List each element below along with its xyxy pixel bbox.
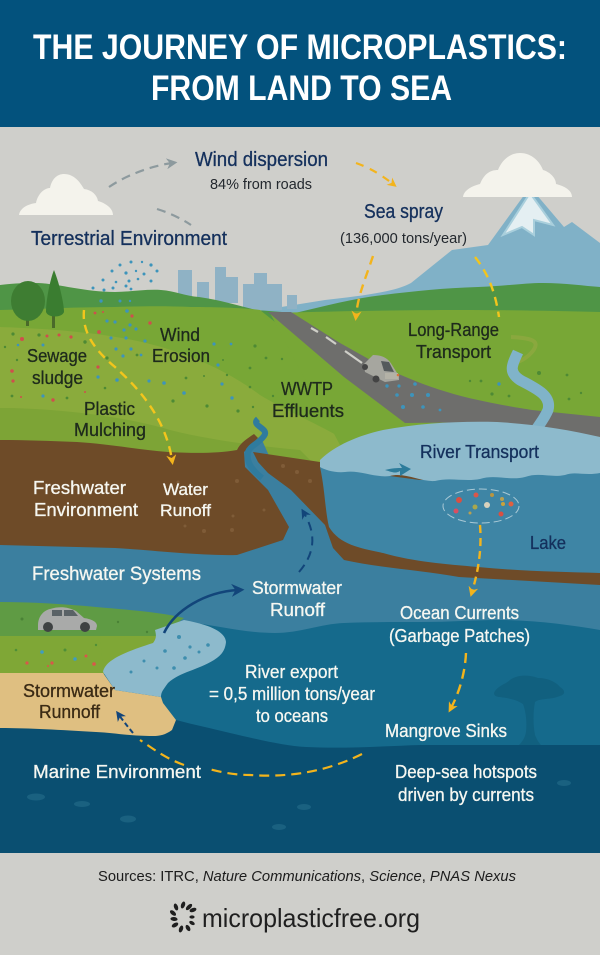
arrow: gray dispersion [109,163,172,187]
road [268,312,600,437]
label: mangrove sinks: Mangrove Sinks [385,721,507,741]
label: long-range transport: Transport [416,342,491,362]
label: wind erosion: Wind [160,325,200,345]
label: stormwater runoff: Stormwater [252,578,342,598]
estuary [103,620,226,697]
label: sea spray: Sea spray [364,201,443,223]
brown soil [0,434,600,585]
icon: mangrove tree [494,676,564,745]
icon: right cloud [463,153,572,197]
label: stormwater runnoff on sand [23,681,115,722]
upper river [511,337,549,440]
arrow: yellow to sea spray [356,163,393,184]
shore litter dots [15,618,148,667]
label: sea spray [340,201,467,247]
deep sea specks [27,780,571,830]
arrow: sea spray downward [356,256,373,316]
arrow: marine long curve right [209,754,362,776]
label: water runoff: Runoff [160,501,211,520]
label: wind dispersion: Wind dispersion [195,149,328,171]
deep ocean [0,720,600,853]
header banner [0,0,600,127]
label: ocean currents [389,603,530,646]
label: sewage sludge [27,346,87,388]
label: stormwater runnoff on sand: Runnoff [39,702,101,722]
back hills [0,283,600,340]
left land [0,602,184,674]
label: lake: Lake [530,533,566,553]
label: stormwater runoff [252,578,342,620]
label: terrestrial environment: Terrestrial Environment [31,228,227,250]
label: freshwater systems: Freshwater Systems [32,564,201,585]
label: wwtp effluents [272,379,344,421]
title: FROM LAND TO SEA [151,69,452,108]
freshwater band [0,440,600,660]
label: river export [209,662,375,726]
label: long-range transport: Long-Range [408,320,499,340]
label: wind dispersion: 84% from roads [210,176,312,193]
estuary particles [130,635,210,674]
label: sewage sludge: sludge [32,368,83,388]
label: ocean currents: (Garbage Patches) [389,626,530,646]
arrow: gray dashes [157,209,191,225]
ocean mid layer [0,620,600,760]
label: deep-sea hotspots: driven by currents [398,785,534,805]
label: wind erosion [152,325,210,366]
sky background [0,127,600,327]
icon: trees [11,270,64,328]
label: plastic mulching: Mulching [74,420,146,440]
label: water runoff [160,480,211,520]
label: freshwater environment [33,478,138,520]
sand beach [0,673,176,736]
arrow: navy dashed up [299,513,312,572]
label: deep-sea hotspots [395,762,537,805]
icon: car on road [362,355,399,382]
footer [0,853,600,955]
icon: city skyline [178,267,297,310]
arrow: marine long curve left [140,740,184,765]
label: river export: to oceans [256,706,328,726]
label: plastic mulching: Plastic [84,399,135,419]
label: freshwater environment: Environment [34,500,138,520]
icon: fish in lake [385,463,411,476]
icon: left cloud [19,174,113,215]
label: wwtp effluents: Effluents [272,401,344,421]
label: water runoff: Water [163,480,208,499]
soil speckles [176,464,312,533]
label: plastic mulching [74,399,146,440]
icon: logo mark [169,901,197,933]
brand name: microplasticfree.org [202,903,420,933]
arrow: navy dashed to sand [119,715,133,733]
icon: tributary river [248,419,265,478]
label: river export: River export [245,662,338,682]
label: ocean currents: Ocean Currents [400,603,519,623]
label: freshwater environment: Freshwater [33,478,126,498]
label: wwtp effluents: WWTP [281,379,333,399]
label: stormwater runnoff on sand: Stormwater [23,681,115,701]
label: deep-sea hotspots: Deep-sea hotspots [395,762,537,782]
label: river export: = 0,5 million tons/year [209,684,375,704]
icon: car on shore [38,607,97,632]
title [33,28,567,108]
label: stormwater runoff: Runoff [270,600,326,620]
sources line: Sources: ITRC, Nature Communications, Science, PNAS Nexus [98,869,516,885]
icon: garbage patch [443,489,519,523]
mountain [250,187,600,330]
label: marine environment: Marine Environment [33,762,201,782]
label: wind erosion: Erosion [152,346,210,366]
label: river transport: River Transport [420,442,539,462]
arrow: to mangrove [451,653,466,708]
arrow: navy solid [164,590,238,633]
arrow: long range [475,257,499,317]
label: sea spray: (136,000 tons/year) [340,230,467,247]
label: wind dispersion [195,149,328,193]
lake [320,422,600,573]
arrow: garbage patch downward [472,525,481,592]
label: long-range transport [408,320,499,362]
microplastic dots: air and land [17,260,501,411]
arrow: land to water runoff [84,310,172,460]
terrain: green fields [0,306,600,470]
label: sewage sludge: Sewage [27,346,87,366]
